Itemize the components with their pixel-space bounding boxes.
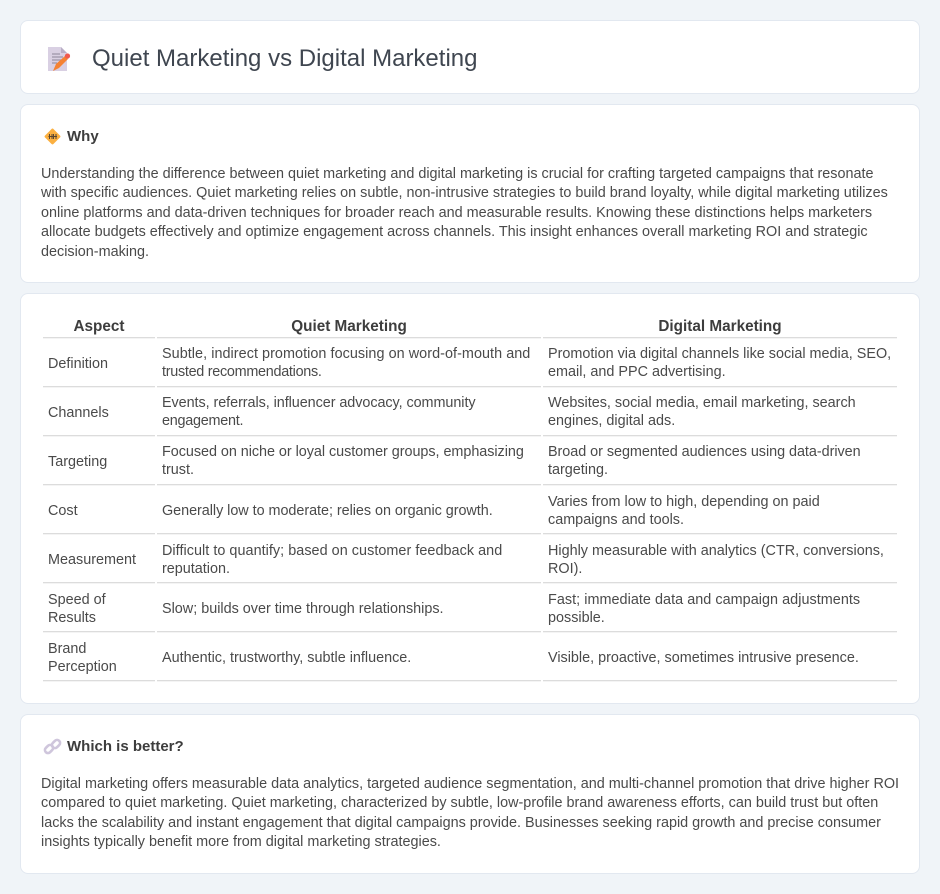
- text block: why: online platforms and data-driven techniques for broader reach and measurable results. Knowing these distinctions helps marketers: [41, 205, 872, 221]
- text block: why: decision-making.: [41, 244, 149, 260]
- row: channels: Events, referrals, influencer advocacy, community: [162, 395, 476, 411]
- row: brand perception: [43, 641, 897, 682]
- row: definition: Promotion via digital channels like social media, SEO,: [548, 346, 891, 362]
- row: measurement: reputation.: [162, 561, 230, 577]
- text block: which is better: lacks the scalability and instant engagement that digital campaigns provide. Businesses seeking rapid growth and precise consumer: [41, 815, 881, 831]
- row: targeting: Targeting: [48, 454, 107, 470]
- table header: Quiet Marketing: [291, 318, 407, 335]
- row: channels: [43, 395, 897, 436]
- row: measurement: ROI).: [548, 561, 582, 577]
- row: cost: Varies from low to high, depending on paid: [548, 494, 820, 510]
- row: speed of results: Results: [48, 610, 96, 626]
- row: definition: email, and PPC advertising.: [548, 364, 726, 380]
- row: cost: [43, 494, 897, 534]
- row: speed of results: Speed of: [48, 592, 106, 608]
- text block: why: Understanding the difference between quiet marketing and digital marketing is crucial for crafting targeted campaigns that resonate: [41, 166, 873, 182]
- row: cost: Generally low to moderate; relies on organic growth.: [162, 503, 493, 519]
- row: measurement: Measurement: [48, 552, 136, 568]
- row: definition: [43, 346, 897, 388]
- row: measurement: [43, 543, 897, 584]
- row: speed of results: possible.: [548, 610, 605, 626]
- text block: which is better: Digital marketing offers measurable data analytics, targeted audience segmentation, and multi-channel promotion that drive higher ROI: [41, 776, 899, 792]
- row: definition: trusted recommendations.: [162, 364, 322, 380]
- panel: which is better: [20, 714, 920, 874]
- row: speed of results: Fast; immediate data and campaign adjustments: [548, 592, 860, 608]
- row: targeting: targeting.: [548, 462, 608, 478]
- row: channels: engines, digital ads.: [548, 413, 675, 429]
- row: cost: Cost: [48, 503, 78, 519]
- heading: which is better: Which is better?: [67, 738, 184, 755]
- row: speed of results: Slow; builds over time through relationships.: [162, 601, 444, 617]
- text block: why: with specific audiences. Quiet marketing relies on subtle, non-intrusive strategies to build brand loyalty, while digital marketing utilizes: [41, 185, 888, 201]
- table header: [43, 318, 897, 338]
- row: channels: engagement.: [162, 413, 243, 429]
- table header: Digital Marketing: [658, 318, 782, 335]
- row: targeting: Broad or segmented audiences using data-driven: [548, 444, 861, 460]
- text block: which is better: compared to quiet marketing. Quiet marketing, characterized by subtle, low-profile brand awareness efforts, can build trust but often: [41, 795, 878, 811]
- row: targeting: [43, 444, 897, 486]
- row: brand perception: Brand: [48, 641, 86, 657]
- icon: chain link: [44, 738, 62, 754]
- row: definition: Definition: [48, 356, 108, 372]
- text block: why: allocate budgets effectively and optimize engagement across channels. This insight enhances overall marketing ROI and strategic: [41, 224, 868, 240]
- text block: which is better: [41, 776, 899, 850]
- row: targeting: Focused on niche or loyal customer groups, emphasizing: [162, 444, 524, 460]
- panel: why: [20, 104, 920, 283]
- text block: why: [41, 166, 888, 260]
- row: channels: Websites, social media, email marketing, search: [548, 395, 856, 411]
- row: measurement: Difficult to quantify; based on customer feedback and: [162, 543, 502, 559]
- row: cost: campaigns and tools.: [548, 512, 684, 528]
- row: definition: Subtle, indirect promotion focusing on word-of-mouth and: [162, 346, 530, 362]
- icon: document with pencil: [48, 47, 70, 71]
- row: brand perception: Visible, proactive, sometimes intrusive presence.: [548, 650, 859, 666]
- panel: header: [20, 20, 920, 94]
- text block: which is better: insights typically benefit more from digital marketing strategies.: [41, 834, 441, 850]
- row: channels: Channels: [48, 405, 109, 421]
- row: speed of results: [43, 592, 897, 632]
- icon: warning diamond: [44, 128, 60, 144]
- heading: why: Why: [67, 128, 99, 145]
- row: brand perception: Authentic, trustworthy, subtle influence.: [162, 650, 411, 666]
- row: measurement: Highly measurable with analytics (CTR, conversions,: [548, 543, 884, 559]
- row: targeting: trust.: [162, 462, 194, 478]
- table header: Aspect: [73, 318, 124, 335]
- panel: comparison table: [20, 293, 920, 704]
- title: Quiet Marketing vs Digital Marketing: [92, 45, 477, 72]
- row: brand perception: Perception: [48, 659, 117, 675]
